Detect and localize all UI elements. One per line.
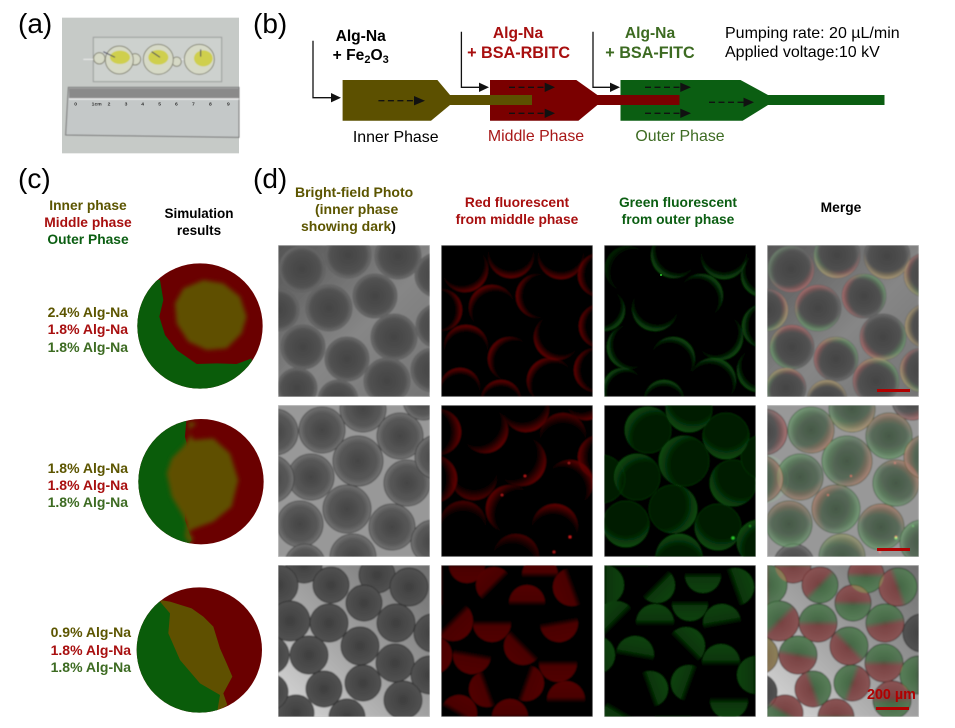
simulation circle 2 bbox=[138, 419, 264, 544]
micrograph row 1 bright-field bbox=[278, 245, 430, 397]
simulation results heading bbox=[164, 206, 234, 238]
concentrations row 2: 1.8% Alg-Na bbox=[48, 477, 128, 493]
micrograph row 2 merge bbox=[767, 405, 919, 557]
panel a: photo of chip and ruler: 7 bbox=[192, 101, 195, 107]
micrograph row 1 green bbox=[604, 245, 756, 397]
panel a: photo of chip and ruler: 0 bbox=[74, 101, 77, 107]
panel a: photo of chip and ruler: 1cm bbox=[92, 101, 102, 107]
scale bar row 2 bbox=[877, 548, 910, 551]
concentrations row 3: 1.8% Alg-Na bbox=[51, 659, 131, 675]
legend of phases: Outer Phase bbox=[47, 232, 129, 247]
concentrations row 1: 1.8% Alg-Na bbox=[48, 339, 128, 355]
scale bar row 3 with label: 200 µm bbox=[867, 687, 916, 703]
panel b: co-flow channel diagram: 2 bbox=[364, 54, 370, 66]
simulation results heading: results bbox=[177, 223, 221, 238]
inner phase channel bbox=[343, 80, 532, 121]
concentrations row 2: 1.8% Alg-Na bbox=[48, 460, 128, 476]
panel a: photo of chip and ruler: 3 bbox=[125, 101, 128, 107]
concentrations row 2: 1.8% Alg-Na bbox=[48, 494, 128, 510]
column title: green fluorescent: Green fluorescent bbox=[619, 195, 737, 210]
column title: bright-field: showing dark) bbox=[301, 218, 396, 234]
panel b: co-flow channel diagram: + BSA-FITC bbox=[605, 44, 695, 62]
panel b: co-flow channel diagram bbox=[313, 25, 900, 146]
panel b: co-flow channel diagram: Middle Phase bbox=[488, 128, 584, 145]
concentrations row 3 bbox=[51, 624, 131, 675]
panel b: co-flow channel diagram: + BSA-RBITC bbox=[467, 44, 570, 62]
flow arrowheads bbox=[414, 83, 754, 118]
inner inlet label: Alg-Na bbox=[336, 28, 386, 45]
micrograph row 3 merge bbox=[767, 565, 919, 717]
panel a: photo of chip and ruler: 4 bbox=[141, 101, 144, 107]
legend of phases bbox=[44, 198, 132, 247]
panel b: co-flow channel diagram: O bbox=[370, 47, 383, 64]
simulation circle 3 bbox=[136, 587, 262, 713]
legend of phases: Middle phase bbox=[44, 215, 132, 230]
panel a: photo of chip and ruler: 9 bbox=[227, 101, 230, 107]
scale bar row 3 with label bbox=[867, 687, 916, 710]
micrograph row 3 bright-field bbox=[278, 565, 430, 717]
micrograph row 3 green bbox=[604, 565, 756, 717]
micrograph row 2 red bbox=[441, 405, 593, 557]
panel a: photo of chip and ruler: 8 bbox=[209, 101, 212, 107]
label (a): (a) bbox=[18, 8, 52, 39]
phase captions: Inner Phase bbox=[353, 129, 439, 146]
pumping parameters: Pumping rate: 20 µL/min bbox=[725, 25, 900, 42]
column title: bright-field bbox=[295, 184, 413, 234]
concentrations row 1: 2.4% Alg-Na bbox=[48, 304, 128, 320]
panel a: photo of chip and ruler bbox=[62, 18, 239, 153]
legend of phases: Inner phase bbox=[49, 198, 127, 213]
simulation results heading: Simulation bbox=[164, 206, 234, 221]
micrograph row 2 green bbox=[604, 405, 756, 557]
column title: bright-field: Bright-field Photo bbox=[295, 184, 413, 200]
concentrations row 1 bbox=[48, 304, 128, 355]
panel b: co-flow channel diagram: Outer Phase bbox=[635, 128, 725, 145]
concentrations row 3: 1.8% Alg-Na bbox=[51, 642, 131, 658]
concentrations row 2 bbox=[48, 460, 128, 510]
middle inlet label: Alg-Na bbox=[493, 25, 543, 42]
label (c): (c) bbox=[18, 163, 51, 194]
micrograph row 1 red bbox=[441, 245, 593, 397]
label (d): (d) bbox=[253, 163, 287, 194]
column title: green fluorescent: from outer phase bbox=[622, 212, 735, 227]
concentrations row 3: 0.9% Alg-Na bbox=[51, 624, 131, 640]
flow direction arrows bbox=[378, 87, 745, 113]
outer inlet label: Alg-Na bbox=[625, 25, 675, 42]
column title: green fluorescent bbox=[619, 195, 737, 227]
micrograph row 3 red bbox=[441, 565, 593, 717]
panel a: photo of chip and ruler: 2 bbox=[108, 101, 111, 107]
micrograph row 1 merge bbox=[767, 245, 919, 397]
micrograph row 2 bright-field bbox=[278, 405, 430, 557]
panel a: photo of chip and ruler: 6 bbox=[175, 101, 178, 107]
scale bar row 1 bbox=[877, 389, 910, 392]
inlet arrows bbox=[313, 32, 611, 98]
outer phase channel bbox=[620, 80, 884, 121]
simulation circle 1 bbox=[137, 263, 263, 389]
middle phase channel bbox=[490, 80, 680, 121]
label (b): (b) bbox=[253, 8, 287, 39]
column title: bright-field: (inner phase bbox=[315, 201, 398, 217]
panel b: co-flow channel diagram: Applied voltage:10 kV bbox=[725, 44, 880, 61]
column title: merge: Merge bbox=[821, 200, 862, 215]
concentrations row 1: 1.8% Alg-Na bbox=[48, 321, 128, 337]
panel a: photo of chip and ruler: 5 bbox=[158, 101, 161, 107]
panel b: co-flow channel diagram: 3 bbox=[383, 54, 389, 66]
panel b: co-flow channel diagram: + Fe bbox=[333, 47, 364, 64]
column title: red fluorescent bbox=[456, 195, 579, 227]
column title: red fluorescent: from middle phase bbox=[456, 212, 579, 227]
column title: red fluorescent: Red fluorescent bbox=[465, 195, 570, 210]
inlet arrowheads bbox=[331, 83, 620, 102]
